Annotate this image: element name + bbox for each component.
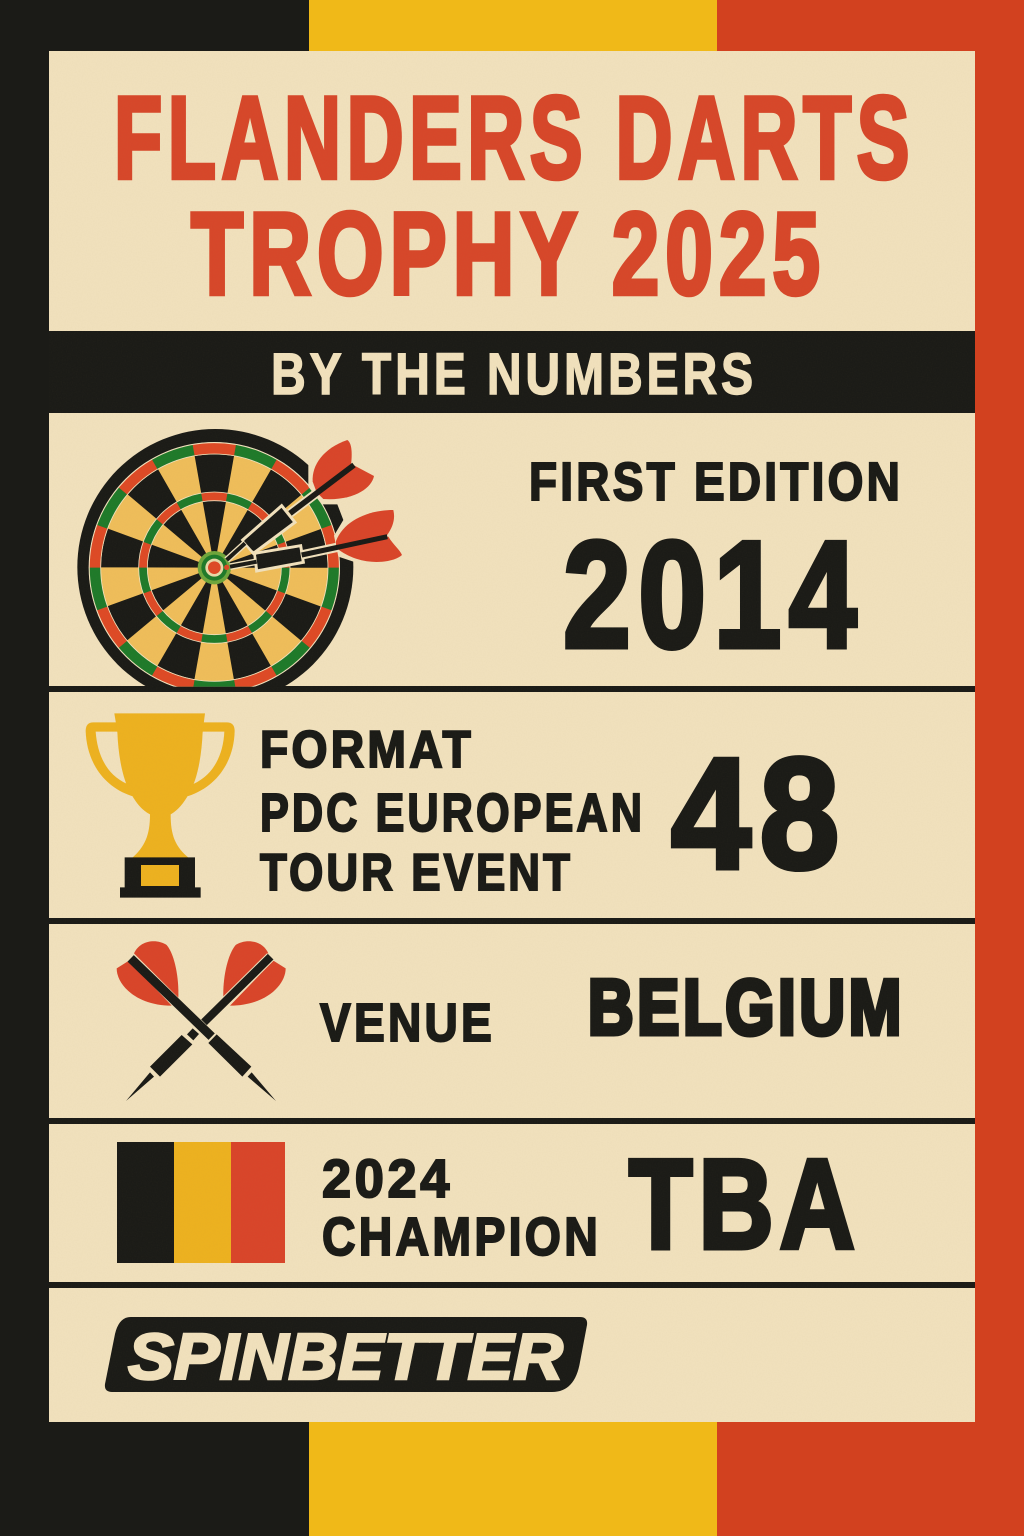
subtitle band — [49, 331, 975, 413]
icon: dartboard with two darts — [76, 429, 407, 706]
icon: crossed darts — [117, 941, 286, 1101]
stat: venue: VENUE — [320, 993, 495, 1053]
subtitle band: BY THE NUMBERS — [271, 342, 757, 407]
stat: venue: BELGIUM — [588, 963, 905, 1051]
stat: first edition — [529, 452, 903, 680]
icon: trophy — [86, 713, 235, 898]
stat: 2024 champion: 2024 — [322, 1149, 453, 1209]
stat: format: PDC EUROPEAN — [260, 783, 645, 843]
stat: 2024 champion — [322, 1149, 601, 1267]
icon: Belgian flag — [117, 1142, 285, 1263]
row dividers — [49, 686, 975, 1288]
stat: format: TOUR EVENT — [260, 844, 573, 902]
stat: 48: 48 — [671, 726, 848, 902]
stat: TBA: TBA — [629, 1133, 861, 1275]
title — [114, 72, 915, 319]
stat: venue — [320, 963, 905, 1053]
stat: first edition: FIRST EDITION — [529, 452, 903, 512]
stat: first edition: 2014 — [563, 510, 864, 680]
logo: Spinbetter: SPINBETTER — [128, 1320, 563, 1393]
dart: upper — [227, 440, 374, 560]
stat: 2024 champion: CHAMPION — [322, 1207, 601, 1267]
dart: lower — [224, 510, 402, 571]
stat: format: FORMAT — [260, 721, 474, 779]
stat: format — [260, 721, 645, 902]
